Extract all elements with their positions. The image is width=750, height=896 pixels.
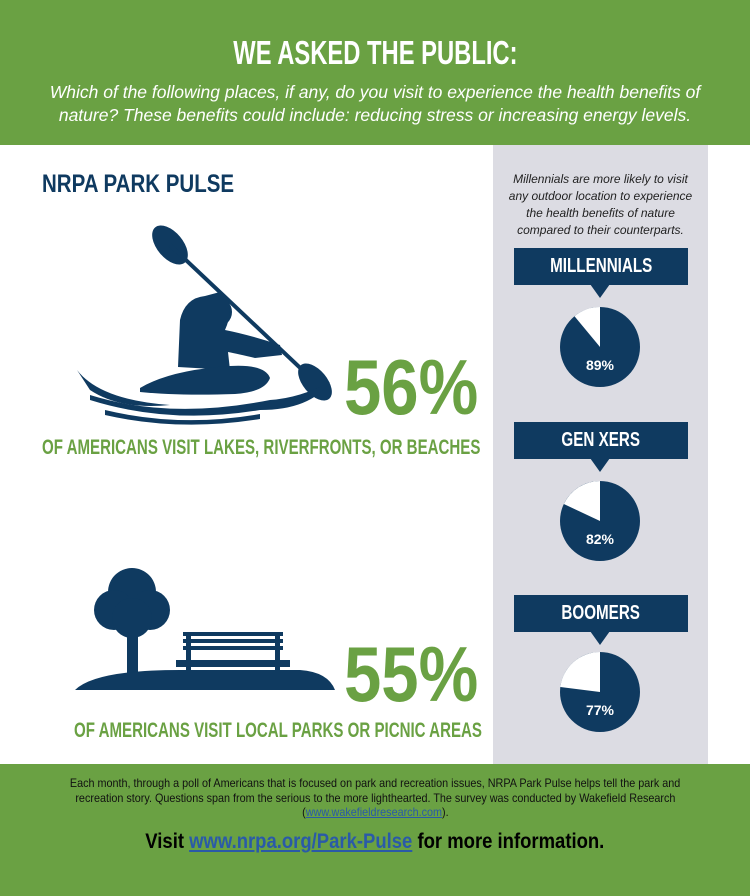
- pie 77%: 77%: [586, 702, 615, 718]
- label box: MILLENNIALS: [550, 255, 652, 277]
- heading: NRPA Park Pulse: NRPA PARK PULSE: [42, 170, 234, 198]
- sidebar note: compared to their counterparts.: [517, 223, 684, 237]
- footer band: [0, 764, 750, 896]
- group: gen xers: [514, 422, 688, 561]
- question text: Which of the following places, if any, do you visit to experience the health benefits of nature? These benefits could include: reducing stress or increasing energy levels.: [50, 82, 700, 125]
- stat 55%: 55%: [344, 630, 478, 718]
- caption parks: OF AMERICANS VISIT LOCAL PARKS OR PICNIC AREAS: [74, 719, 482, 742]
- label box: BOOMERS: [562, 602, 640, 624]
- footer text: Each month, through a poll of Americans that is focused on park and recreation issues, NRPA Park Pulse helps tell the park and: [70, 776, 680, 790]
- footer text: [70, 776, 680, 819]
- header band: [0, 0, 750, 145]
- sidebar note: [509, 172, 692, 237]
- footer text: recreation story. Questions span from the serious to the more lighthearted. The survey was conducted by Wakefield Research: [75, 790, 675, 804]
- footer text: (www.wakefieldresearch.com).: [302, 805, 448, 819]
- icon: kayaker: [77, 226, 332, 425]
- pie 82%: [560, 459, 640, 561]
- group: millennials: [514, 248, 688, 387]
- group: boomers: [514, 595, 688, 732]
- pie 89%: 89%: [586, 357, 615, 373]
- stat 56%: 56%: [344, 343, 478, 431]
- title: WE ASKED THE PUBLIC:: [233, 34, 517, 71]
- pie 77%: [560, 632, 640, 732]
- sidebar panel: [493, 145, 708, 764]
- pie 89%: [560, 285, 640, 387]
- pie 82%: 82%: [586, 531, 615, 547]
- label box: [514, 422, 688, 459]
- sidebar note: Millennials are more likely to visit: [513, 172, 688, 186]
- label box: [514, 595, 688, 632]
- sidebar note: the health benefits of nature: [526, 206, 675, 220]
- sidebar note: any outdoor location to experience: [509, 189, 692, 203]
- label box: GEN XERS: [562, 429, 640, 451]
- label box: [514, 248, 688, 285]
- call to action: Visit www.nrpa.org/Park-Pulse for more information.: [145, 830, 605, 853]
- icon: tree and bench: [75, 568, 335, 690]
- caption lakes: OF AMERICANS VISIT LAKES, RIVERFRONTS, OR BEACHES: [42, 436, 480, 459]
